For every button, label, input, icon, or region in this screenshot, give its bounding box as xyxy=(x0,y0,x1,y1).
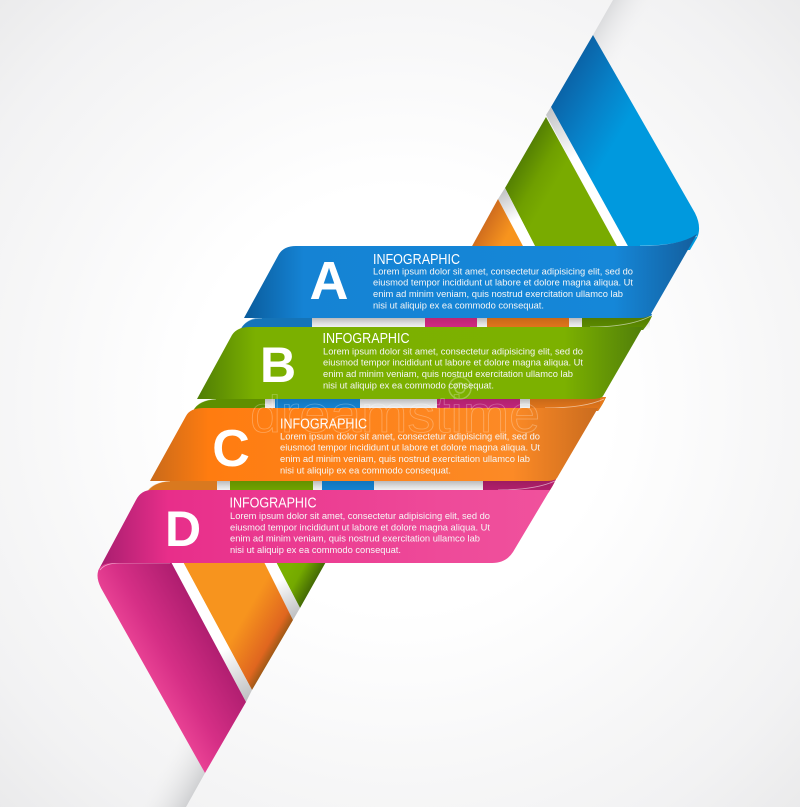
tail segment: orange xyxy=(471,199,524,248)
body text A: eiusmod tempor incididunt ut labore et dolore magna aliqua. Ut xyxy=(373,278,633,288)
fold shadow: bottom xyxy=(125,700,205,807)
body text A: nisi ut aliquip ex ea commodo consequat. xyxy=(373,300,544,310)
lower ribbon tail xyxy=(98,560,327,773)
heading A: INFOGRAPHIC xyxy=(373,252,460,268)
body text B: Lorem ipsum dolor sit amet, consectetur adipisicing elit, sed do xyxy=(323,346,583,356)
body text A: enim ad minim veniam, quis nostrud exercitation ullamco lab xyxy=(373,289,623,299)
body text B: enim ad minim veniam, quis nostrud exercitation ullamco lab xyxy=(323,369,573,379)
body text C: nisi ut aliquip ex ea commodo consequat. xyxy=(280,465,451,475)
ribbon A xyxy=(244,234,697,318)
tail segment: green xyxy=(505,117,618,248)
fold shadow: top xyxy=(593,0,690,98)
ribbon D xyxy=(98,490,550,571)
watermark: dreamstime xyxy=(250,386,540,444)
panel C xyxy=(150,408,598,481)
panel B xyxy=(197,327,643,399)
tail segment: green xyxy=(275,560,327,608)
body text C xyxy=(280,431,540,475)
stripe row between B and C xyxy=(193,397,606,411)
fold highlights xyxy=(100,236,697,570)
body text D: enim ad minim veniam, quis nostrud exercitation ullamco lab xyxy=(230,534,480,544)
panel A xyxy=(244,234,697,318)
tail segment: pink xyxy=(98,560,246,773)
letter A: A xyxy=(310,251,348,311)
body text D: eiusmod tempor incididunt ut labore et dolore magna aliqua. Ut xyxy=(230,522,490,532)
heading B: INFOGRAPHIC xyxy=(322,331,410,347)
body text B: nisi ut aliquip ex ea commodo consequat. xyxy=(323,380,494,390)
ribbon B xyxy=(197,327,643,399)
letter D: D xyxy=(165,501,201,557)
upper ribbon tail xyxy=(471,35,699,250)
body text B xyxy=(323,346,583,390)
stripe row between A and B xyxy=(240,314,652,330)
body text D xyxy=(230,511,490,555)
panel D xyxy=(98,490,550,571)
body text D: Lorem ipsum dolor sit amet, consectetur adipisicing elit, sed do xyxy=(230,511,490,521)
tail segment: blue xyxy=(551,35,699,250)
tail segment: orange xyxy=(182,560,293,690)
heading D: INFOGRAPHIC xyxy=(230,496,316,512)
letter B: B xyxy=(260,337,296,393)
tail segment: white stripe xyxy=(170,560,252,702)
heading C: INFOGRAPHIC xyxy=(280,416,367,432)
tail segment: white stripe xyxy=(263,560,300,620)
body text B: eiusmod tempor incididunt ut labore et dolore magna aliqua. Ut xyxy=(323,358,583,368)
body text A xyxy=(373,266,633,310)
body text C: Lorem ipsum dolor sit amet, consectetur adipisicing elit, sed do xyxy=(280,431,540,441)
stripe row between C and D xyxy=(146,479,556,493)
body text A: Lorem ipsum dolor sit amet, consectetur adipisicing elit, sed do xyxy=(373,266,633,276)
body text D: nisi ut aliquip ex ea commodo consequat. xyxy=(230,545,401,555)
ribbon C xyxy=(150,408,598,481)
body text C: enim ad minim veniam, quis nostrud exercitation ullamco lab xyxy=(280,454,530,464)
letter C: C xyxy=(212,420,250,478)
tail segment: white stripe xyxy=(546,107,629,248)
tail segment: white stripe xyxy=(498,188,536,248)
body text C: eiusmod tempor incididunt ut labore et dolore magna aliqua. Ut xyxy=(280,443,540,453)
